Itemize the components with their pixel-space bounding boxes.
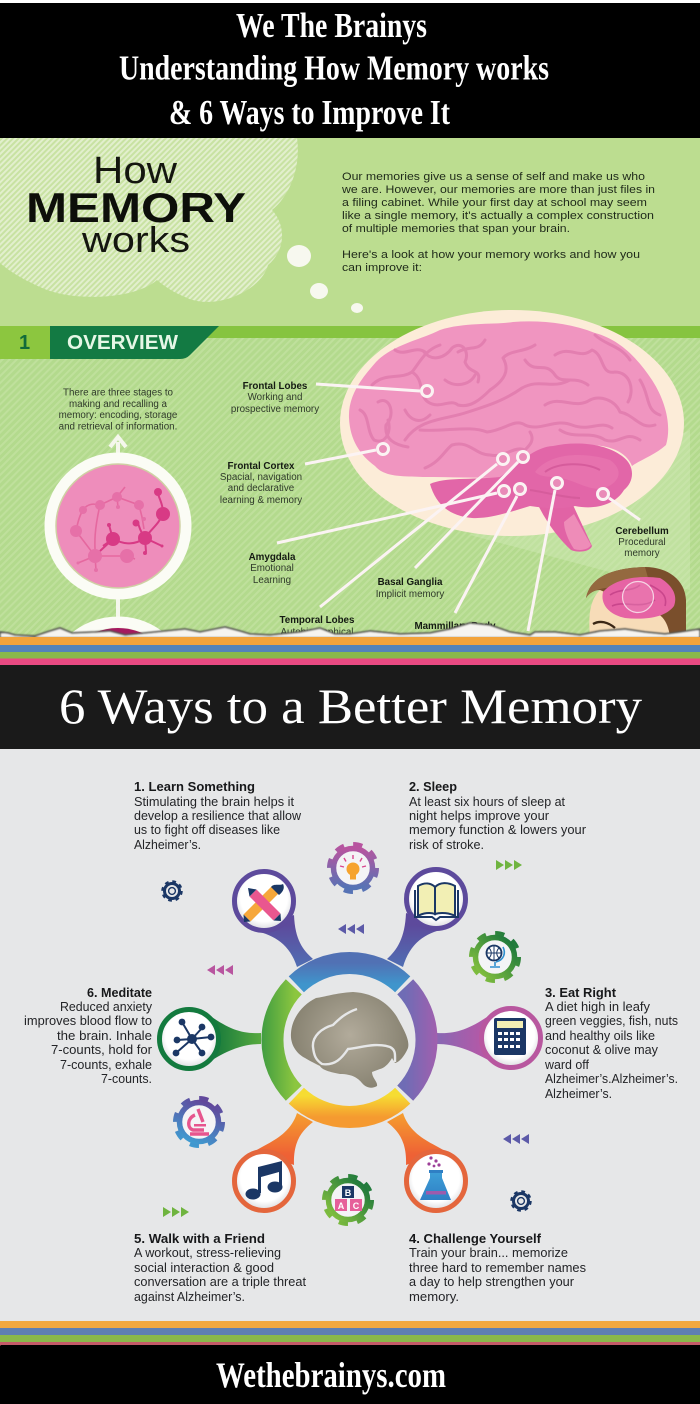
- header: title banner: We The Brainys: [236, 6, 427, 45]
- intro text: a filing cabinet. While your first day at school may seem: [342, 197, 647, 209]
- stages text: There are three stages to: [63, 388, 174, 398]
- text: walk with a friend: against Alzheimer’s.: [134, 1289, 245, 1304]
- top edge: [0, 0, 700, 3]
- text: walk with a friend: 5. Walk with a Friend: [134, 1231, 265, 1246]
- text: learn something: Stimulating the brain helps it: [134, 794, 294, 809]
- gear: abc blocks: C: [353, 1201, 360, 1211]
- arrows: purple left centre: [338, 924, 364, 934]
- arrow up and neuron circle: [44, 434, 192, 635]
- header: title banner: [0, 3, 700, 138]
- text: challenge yourself: memory.: [409, 1289, 459, 1304]
- text: meditate: Reduced anxiety: [60, 999, 153, 1014]
- pin: calculator: [482, 1008, 540, 1068]
- intro text: Here's a look at how your memory works and how you: [342, 249, 640, 261]
- arrows: green right bottom: [163, 1207, 189, 1217]
- text: meditate: [24, 985, 153, 1086]
- text: meditate: 7-counts, hold for: [51, 1042, 153, 1057]
- header: title banner: Understanding How Memory works: [119, 48, 549, 88]
- banner: 6 ways: [0, 665, 700, 749]
- text: eat right: and healthy oils like: [545, 1028, 655, 1043]
- text: challenge yourself: [409, 1231, 586, 1304]
- gyri folds: [360, 335, 660, 468]
- intro text: we are. However, our memories are more than just files in: [341, 184, 655, 196]
- pin: flask: [406, 1152, 466, 1210]
- label: cerebellum: Procedural: [618, 537, 666, 548]
- colour stripes top: [0, 637, 700, 665]
- cerebrum: [349, 321, 668, 478]
- callout lines and rings: [277, 384, 640, 631]
- label: frontal cortex: [220, 461, 302, 506]
- text: sleep: [409, 779, 587, 852]
- stages text: making and recalling a: [69, 399, 168, 410]
- footer: website: Wethebrainys.com: [216, 1355, 446, 1395]
- text: walk with a friend: social interaction & good: [134, 1260, 274, 1275]
- label: amygdala: Emotional: [250, 563, 294, 574]
- text: walk with a friend: A workout, stress-relieving: [134, 1245, 281, 1260]
- thought cloud with title: MEMORY: [26, 184, 246, 231]
- centre ring: [272, 963, 427, 1117]
- limbic and cerebellum: [430, 443, 632, 518]
- brain halo: [340, 310, 684, 536]
- text: challenge yourself: 4. Challenge Yourself: [409, 1231, 542, 1246]
- text: eat right: ward off: [544, 1057, 589, 1072]
- text: challenge yourself: Train your brain... memorize: [409, 1245, 568, 1260]
- gear: small navy top left: [162, 882, 182, 900]
- footer: website: [1, 1345, 700, 1404]
- label: frontal lobes: [231, 381, 319, 415]
- pin: art: [234, 872, 294, 930]
- label: temporal lobes: Temporal Lobes: [280, 615, 355, 626]
- thought bubbles: [287, 245, 363, 313]
- intro text: can improve it:: [342, 262, 422, 274]
- text: learn something: us to fight off diseases like: [134, 822, 280, 837]
- text: walk with a friend: conversation are a triple threat: [134, 1274, 306, 1289]
- text: walk with a friend: [134, 1231, 306, 1304]
- section bar: 1 overview: OVERVIEW: [67, 332, 178, 354]
- section bar: 1 overview: 1: [19, 332, 30, 354]
- label: amygdala: [249, 552, 296, 586]
- arrows: magenta left: [207, 965, 233, 975]
- pin: network: [160, 1010, 218, 1068]
- connectors from ring to pins: [209, 913, 490, 1165]
- panel: six ways: [0, 749, 700, 1321]
- label: temporal lobes: [280, 616, 354, 634]
- label: amygdala: Amygdala: [249, 552, 296, 563]
- text: learn something: 1. Learn Something: [134, 779, 255, 794]
- text: sleep: At least six hours of sleep at: [409, 794, 565, 809]
- brain illustration: [349, 321, 668, 552]
- header: title banner: & 6 Ways to Improve It: [169, 93, 450, 132]
- person head with brain: [586, 567, 686, 637]
- text: meditate: the brain. Inhale: [57, 1028, 152, 1043]
- arrows: green right top: [496, 860, 522, 870]
- text: meditate: 7-counts, exhale: [60, 1057, 152, 1072]
- text: meditate: improves blood flow to: [24, 1013, 152, 1028]
- text: eat right: A diet high in leafy: [545, 999, 651, 1014]
- text: eat right: 3. Eat Right: [545, 985, 617, 1000]
- text: challenge yourself: three hard to remember names: [409, 1260, 586, 1275]
- label: amygdala: Learning: [253, 575, 291, 586]
- stages text: [59, 388, 178, 432]
- intro text: [341, 171, 655, 274]
- text: learn something: develop a resilience that allow: [134, 808, 302, 823]
- label: frontal cortex: learning & memory: [220, 495, 302, 506]
- text: sleep: 2. Sleep: [409, 779, 457, 794]
- label: frontal lobes: prospective memory: [231, 404, 319, 415]
- gear: globe: [472, 934, 518, 980]
- thought cloud with title: How: [93, 150, 178, 192]
- text: meditate: 7-counts.: [101, 1071, 152, 1086]
- text: eat right: [544, 985, 678, 1101]
- label: mammillary body: Mammillary Body: [414, 621, 496, 632]
- intro text: of multiple memories that span your brain.: [342, 223, 570, 235]
- neuron network: [70, 487, 170, 572]
- stages text: memory: encoding, storage: [59, 410, 178, 421]
- gear: abc blocks: [325, 1177, 371, 1223]
- text: sleep: night helps improve your: [409, 808, 550, 823]
- section bar: 1 overview: [0, 326, 700, 359]
- pin: music: [234, 1152, 294, 1210]
- label: basal ganglia: [376, 577, 444, 600]
- gear: abc blocks: A: [338, 1201, 345, 1211]
- text: eat right: Alzheimer’s.: [545, 1086, 612, 1101]
- label: cerebellum: memory: [624, 548, 660, 559]
- gear: abc blocks: B: [345, 1188, 352, 1198]
- label: frontal lobes: Working and: [248, 392, 302, 403]
- banner: 6 ways: 6 Ways to a Better Memory: [59, 678, 642, 734]
- icon: centre brain: [291, 992, 408, 1088]
- label: cerebellum: Cerebellum: [615, 526, 669, 537]
- brain highlight beam: [470, 430, 690, 590]
- text: challenge yourself: a day to help strengthen your: [409, 1274, 575, 1289]
- gear: bulb: [330, 845, 376, 891]
- thought cloud with title: [0, 138, 298, 302]
- stages text: and retrieval of information.: [59, 422, 177, 432]
- arrows: purple left right side: [503, 1134, 529, 1144]
- text: sleep: memory function & lowers your: [409, 822, 587, 837]
- text: learn something: Alzheimer’s.: [134, 837, 201, 852]
- gear: microscope: [176, 1099, 222, 1145]
- intro text: Our memories give us a sense of self and make us who: [342, 171, 645, 183]
- label: frontal cortex: Frontal Cortex: [228, 461, 295, 472]
- label: frontal cortex: Spacial, navigation: [220, 472, 302, 483]
- gear: small navy bottom right: [512, 1192, 530, 1210]
- intro text: like a single memory, it's actually a complex construction: [342, 210, 654, 222]
- text: eat right: green veggies, fish, nuts: [545, 1013, 678, 1028]
- text: meditate: 6. Meditate: [87, 985, 152, 1000]
- colour stripes bottom: [0, 1321, 700, 1346]
- text: eat right: Alzheimer’s.Alzheimer’s.: [545, 1071, 678, 1086]
- label: basal ganglia: Implicit memory: [376, 589, 444, 600]
- thought cloud with title: works: [81, 219, 190, 260]
- torn paper edge: [0, 623, 700, 638]
- pin: book: [406, 870, 466, 928]
- label: frontal lobes: Frontal Lobes: [243, 381, 308, 392]
- text: learn something: [134, 779, 302, 852]
- brain stem: [538, 505, 592, 552]
- next stage circle: [72, 616, 162, 635]
- panel: how memory works: [0, 138, 700, 637]
- label: cerebellum: [615, 526, 669, 559]
- label: temporal lobes: Autobiographical: [281, 627, 353, 638]
- text: eat right: coconut & olive may: [545, 1042, 659, 1057]
- text: sleep: risk of stroke.: [409, 837, 484, 852]
- label: basal ganglia: Basal Ganglia: [378, 577, 443, 588]
- label: frontal cortex: and declarative: [228, 483, 295, 494]
